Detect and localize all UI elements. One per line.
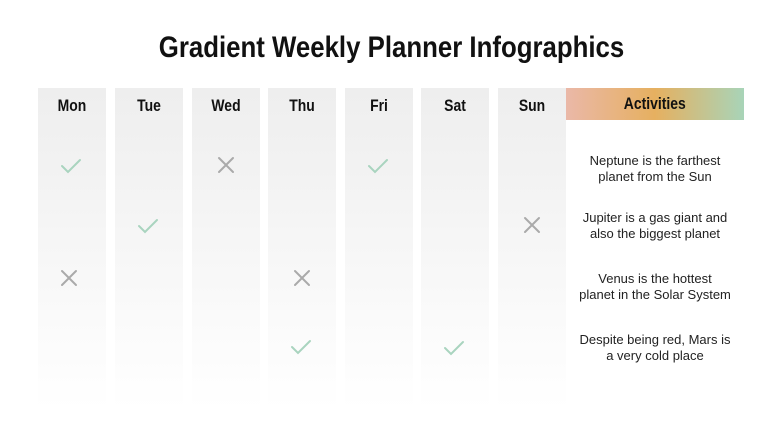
text: Tue [137,96,161,115]
text: a very cold place [606,348,704,363]
text: Neptune is the farthest [590,153,720,168]
column: Fri [345,88,413,410]
text: Thu [289,96,315,115]
text: Jupiter is a gas giant and [583,210,727,225]
text: Sat [444,96,466,115]
text: also the biggest planet [590,226,720,241]
text: Venus is the hottest [598,271,712,286]
column: Sat [421,88,489,410]
text: Wed [211,96,241,115]
column: Tue [115,88,183,410]
text: Despite being red, Mars is [579,332,730,347]
text: Sun [519,96,545,115]
column: Sun [498,88,566,410]
title: Gradient Weekly Planner Infographics [159,31,624,64]
text: planet from the Sun [598,169,712,184]
text: planet in the Solar System [579,287,731,302]
activities header: Activities [624,94,686,113]
activity texts [579,153,731,363]
day labels [58,96,545,115]
column: Thu [268,88,336,410]
text: Fri [370,96,388,115]
activities header [566,88,744,120]
text: Mon [58,96,86,115]
column: Mon [38,88,106,410]
column: Wed [192,88,260,410]
